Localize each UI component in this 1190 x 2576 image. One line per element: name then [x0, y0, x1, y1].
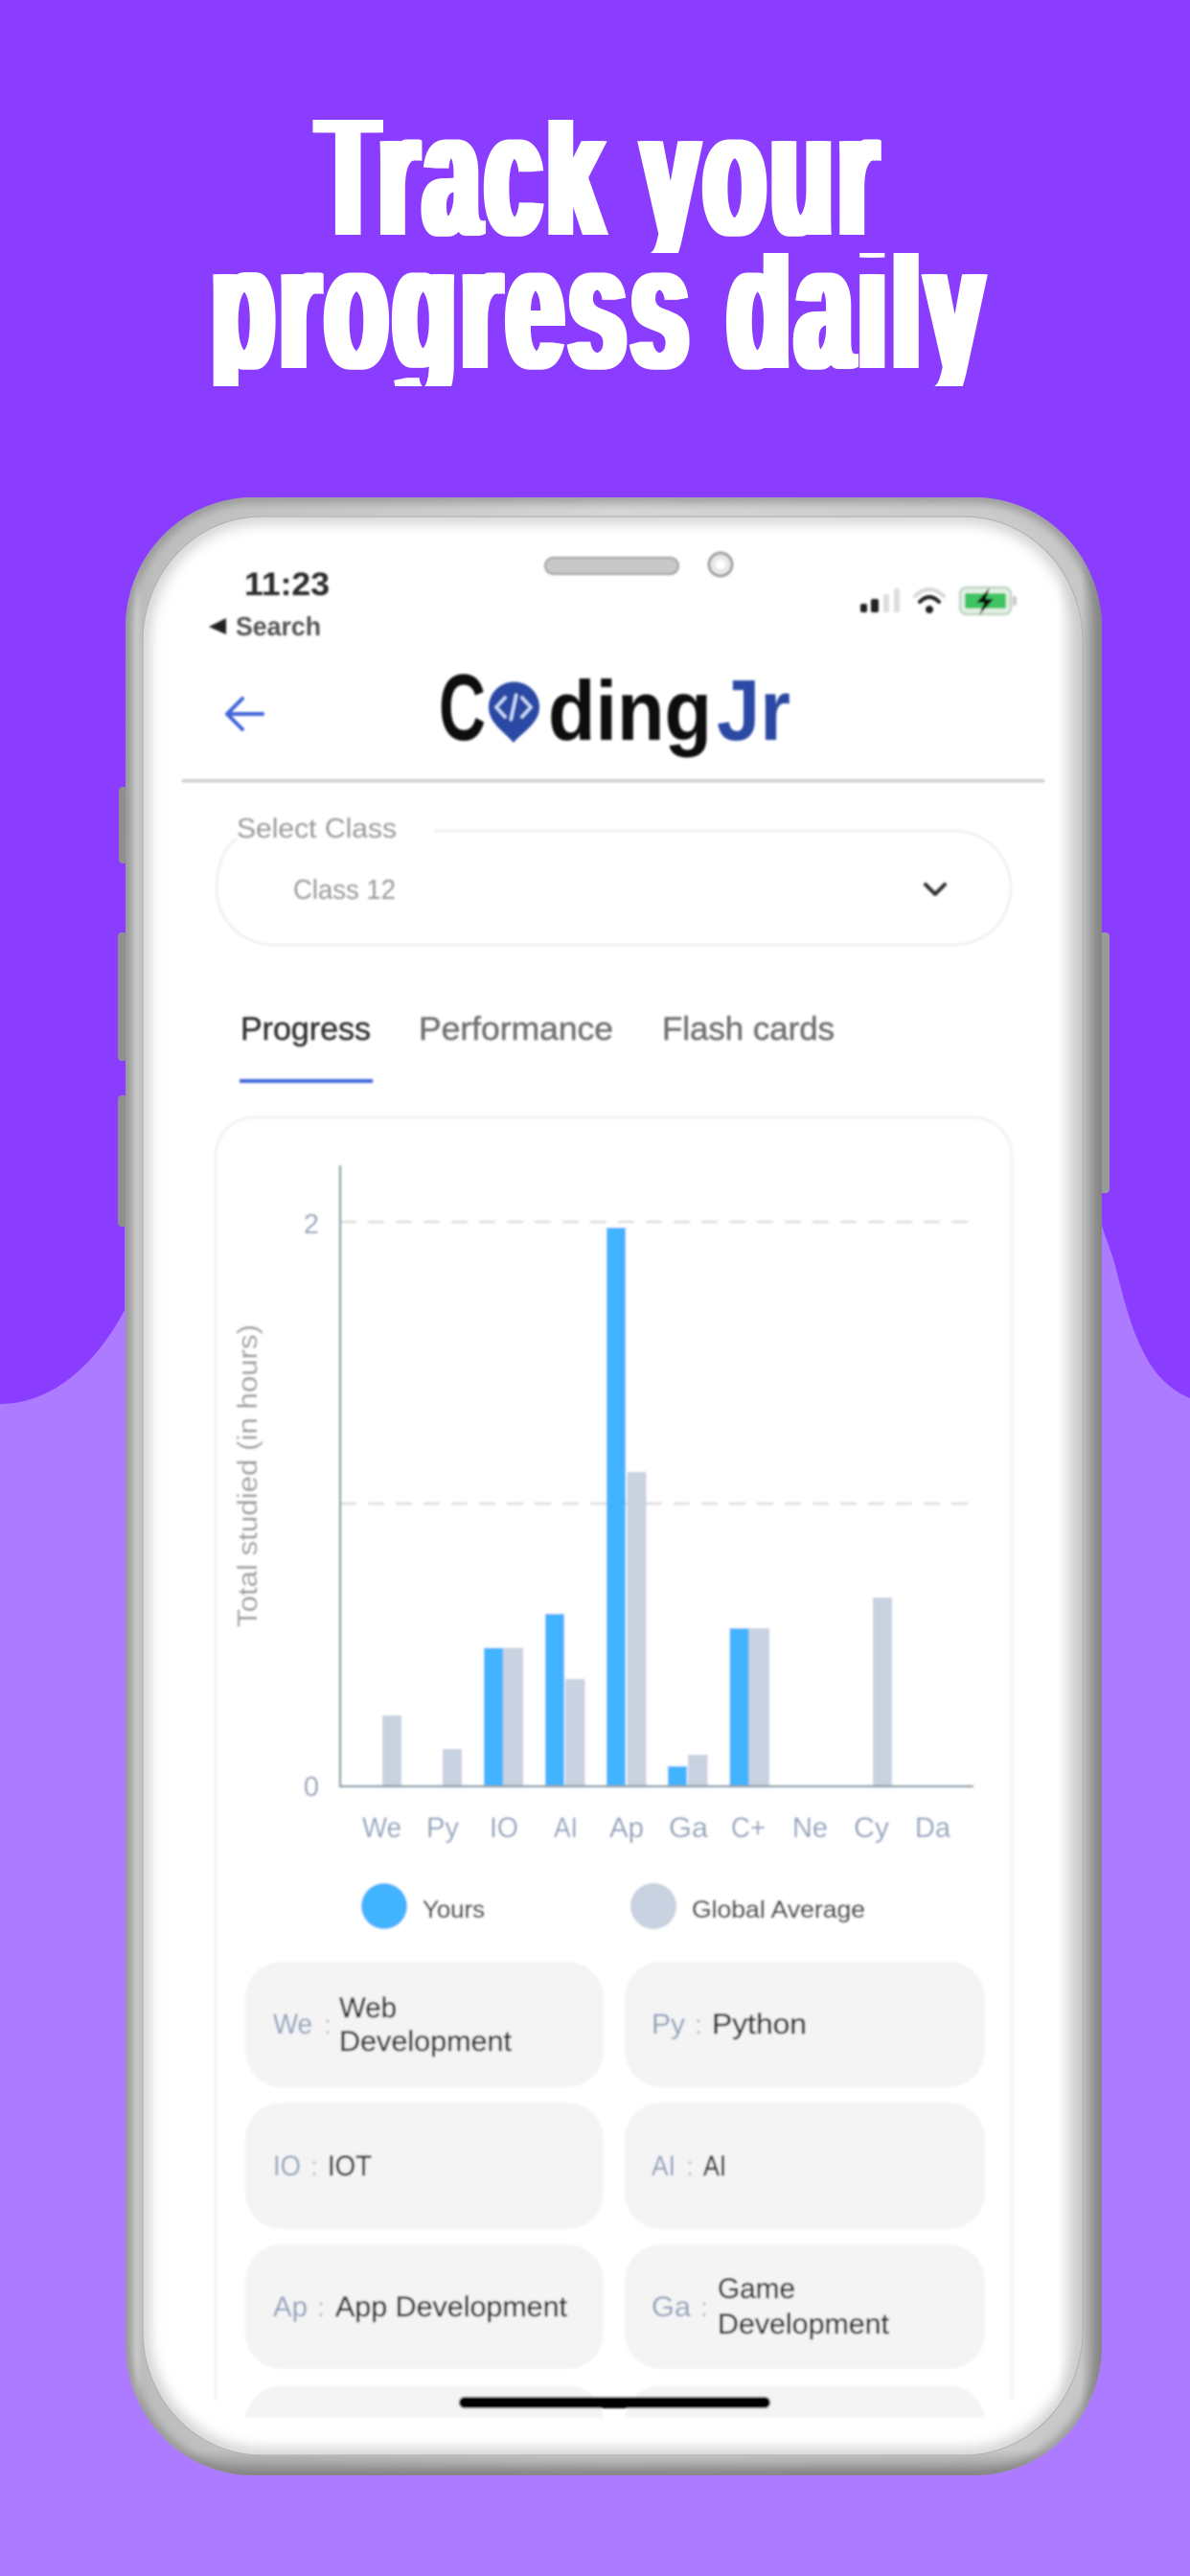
subject key chip: IOT: [245, 2103, 604, 2229]
x axis labels: [362, 1812, 950, 1844]
subject key chip: IOT: IO: [273, 2150, 301, 2182]
subject key chip: Game Development: [625, 2244, 985, 2369]
icon: signal strength: [860, 588, 900, 612]
x axis labels: We: [362, 1812, 401, 1844]
x axis labels: Ap: [609, 1812, 644, 1844]
title: [213, 120, 988, 386]
logo: CodingJr: [439, 655, 790, 760]
phone bezel: [126, 497, 1102, 2475]
x axis labels: C+: [731, 1812, 766, 1844]
subject key chip: Python: :: [695, 2010, 702, 2039]
subject key chip: Web Development: We: [273, 2009, 312, 2040]
class selector: Select Class: [237, 814, 397, 844]
x axis labels: Cy: [854, 1812, 889, 1844]
subject key chip: App Development: [245, 2244, 604, 2369]
subject key chip: Game Development: Game: [718, 2273, 795, 2305]
bar chart: [233, 1165, 973, 1844]
x axis labels: Ne: [792, 1812, 828, 1844]
x axis labels: IO: [490, 1812, 518, 1844]
logo: CodingJr: Jr: [717, 663, 790, 759]
subject key chip: AI: AI: [652, 2150, 675, 2182]
class selector: [217, 814, 1011, 945]
chart legend: Global Average: [692, 1897, 865, 1923]
x axis labels: Ga: [669, 1812, 708, 1844]
subject key chip: AI: [625, 2103, 985, 2229]
x axis labels: Py: [426, 1812, 459, 1844]
subject key chip: Python: Python: [712, 2009, 807, 2040]
subject key chip: Web Development: Development: [339, 2026, 513, 2058]
phone side buttons: [118, 787, 1110, 1227]
class selector: Class 12: [293, 875, 396, 906]
subject key chip: App Development: App Development: [335, 2291, 568, 2323]
status bar back to search: Search: [236, 611, 321, 641]
y axis labels: 2: [304, 1209, 319, 1240]
home indicator: [459, 2397, 770, 2408]
tabs: Progress: [240, 1011, 371, 1047]
subject key chip: Python: Py: [652, 2009, 685, 2040]
tabs: [240, 1011, 835, 1083]
icon: dropdown chevron: [926, 885, 945, 894]
background: dark purple wave: [0, 0, 1190, 1404]
title: Track your: [317, 76, 882, 273]
subject key chip: App Development: :: [317, 2292, 325, 2322]
y axis labels: [304, 1209, 319, 1803]
logo: CodingJr: ding: [548, 663, 712, 758]
subject key chip: Python: [625, 1962, 985, 2087]
y axis labels: 0: [304, 1772, 319, 1803]
panel: progress chart card: [215, 1116, 1013, 2400]
chart legend: Yours: [423, 1897, 485, 1923]
subject key chip: IOT: :: [310, 2151, 318, 2181]
icon: battery charging: [960, 587, 1017, 615]
logo: CodingJr: C: [439, 655, 486, 760]
subject key chip: Game Development: Development: [718, 2309, 890, 2340]
tabs: Flash cards: [662, 1011, 835, 1047]
title: progress daily: [212, 209, 988, 406]
x axis labels: Da: [915, 1812, 950, 1844]
subject key chip: Game Development: Ga: [652, 2291, 691, 2323]
speaker and camera: [545, 553, 732, 576]
icon: logo pin: [489, 682, 539, 743]
x axis labels: AI: [554, 1812, 578, 1844]
subject key chip: App Development: Ap: [273, 2291, 308, 2323]
subject key chip: IOT: IOT: [328, 2150, 372, 2182]
tabs: Performance: [419, 1011, 613, 1047]
phone screen: [143, 517, 1083, 2555]
subject key chip: Web Development: Web: [339, 1992, 397, 2024]
icon: back arrow: [227, 699, 263, 729]
subject key chip: AI: AI: [703, 2150, 726, 2182]
icon: wifi: [915, 589, 944, 613]
subject key chip: Game Development: :: [700, 2292, 708, 2322]
chart legend: [361, 1883, 865, 1929]
y axis title: Total studied (in hours): [233, 1324, 263, 1627]
phone mockup: [118, 497, 1110, 2555]
subject key chip: Web Development: [245, 1962, 604, 2087]
subject key chip: AI: :: [686, 2151, 694, 2181]
subject key chip: Web Development: :: [324, 2010, 332, 2039]
subject key chips: clipped fourth row: [247, 2386, 983, 2417]
status bar time: 11:23: [244, 566, 330, 603]
